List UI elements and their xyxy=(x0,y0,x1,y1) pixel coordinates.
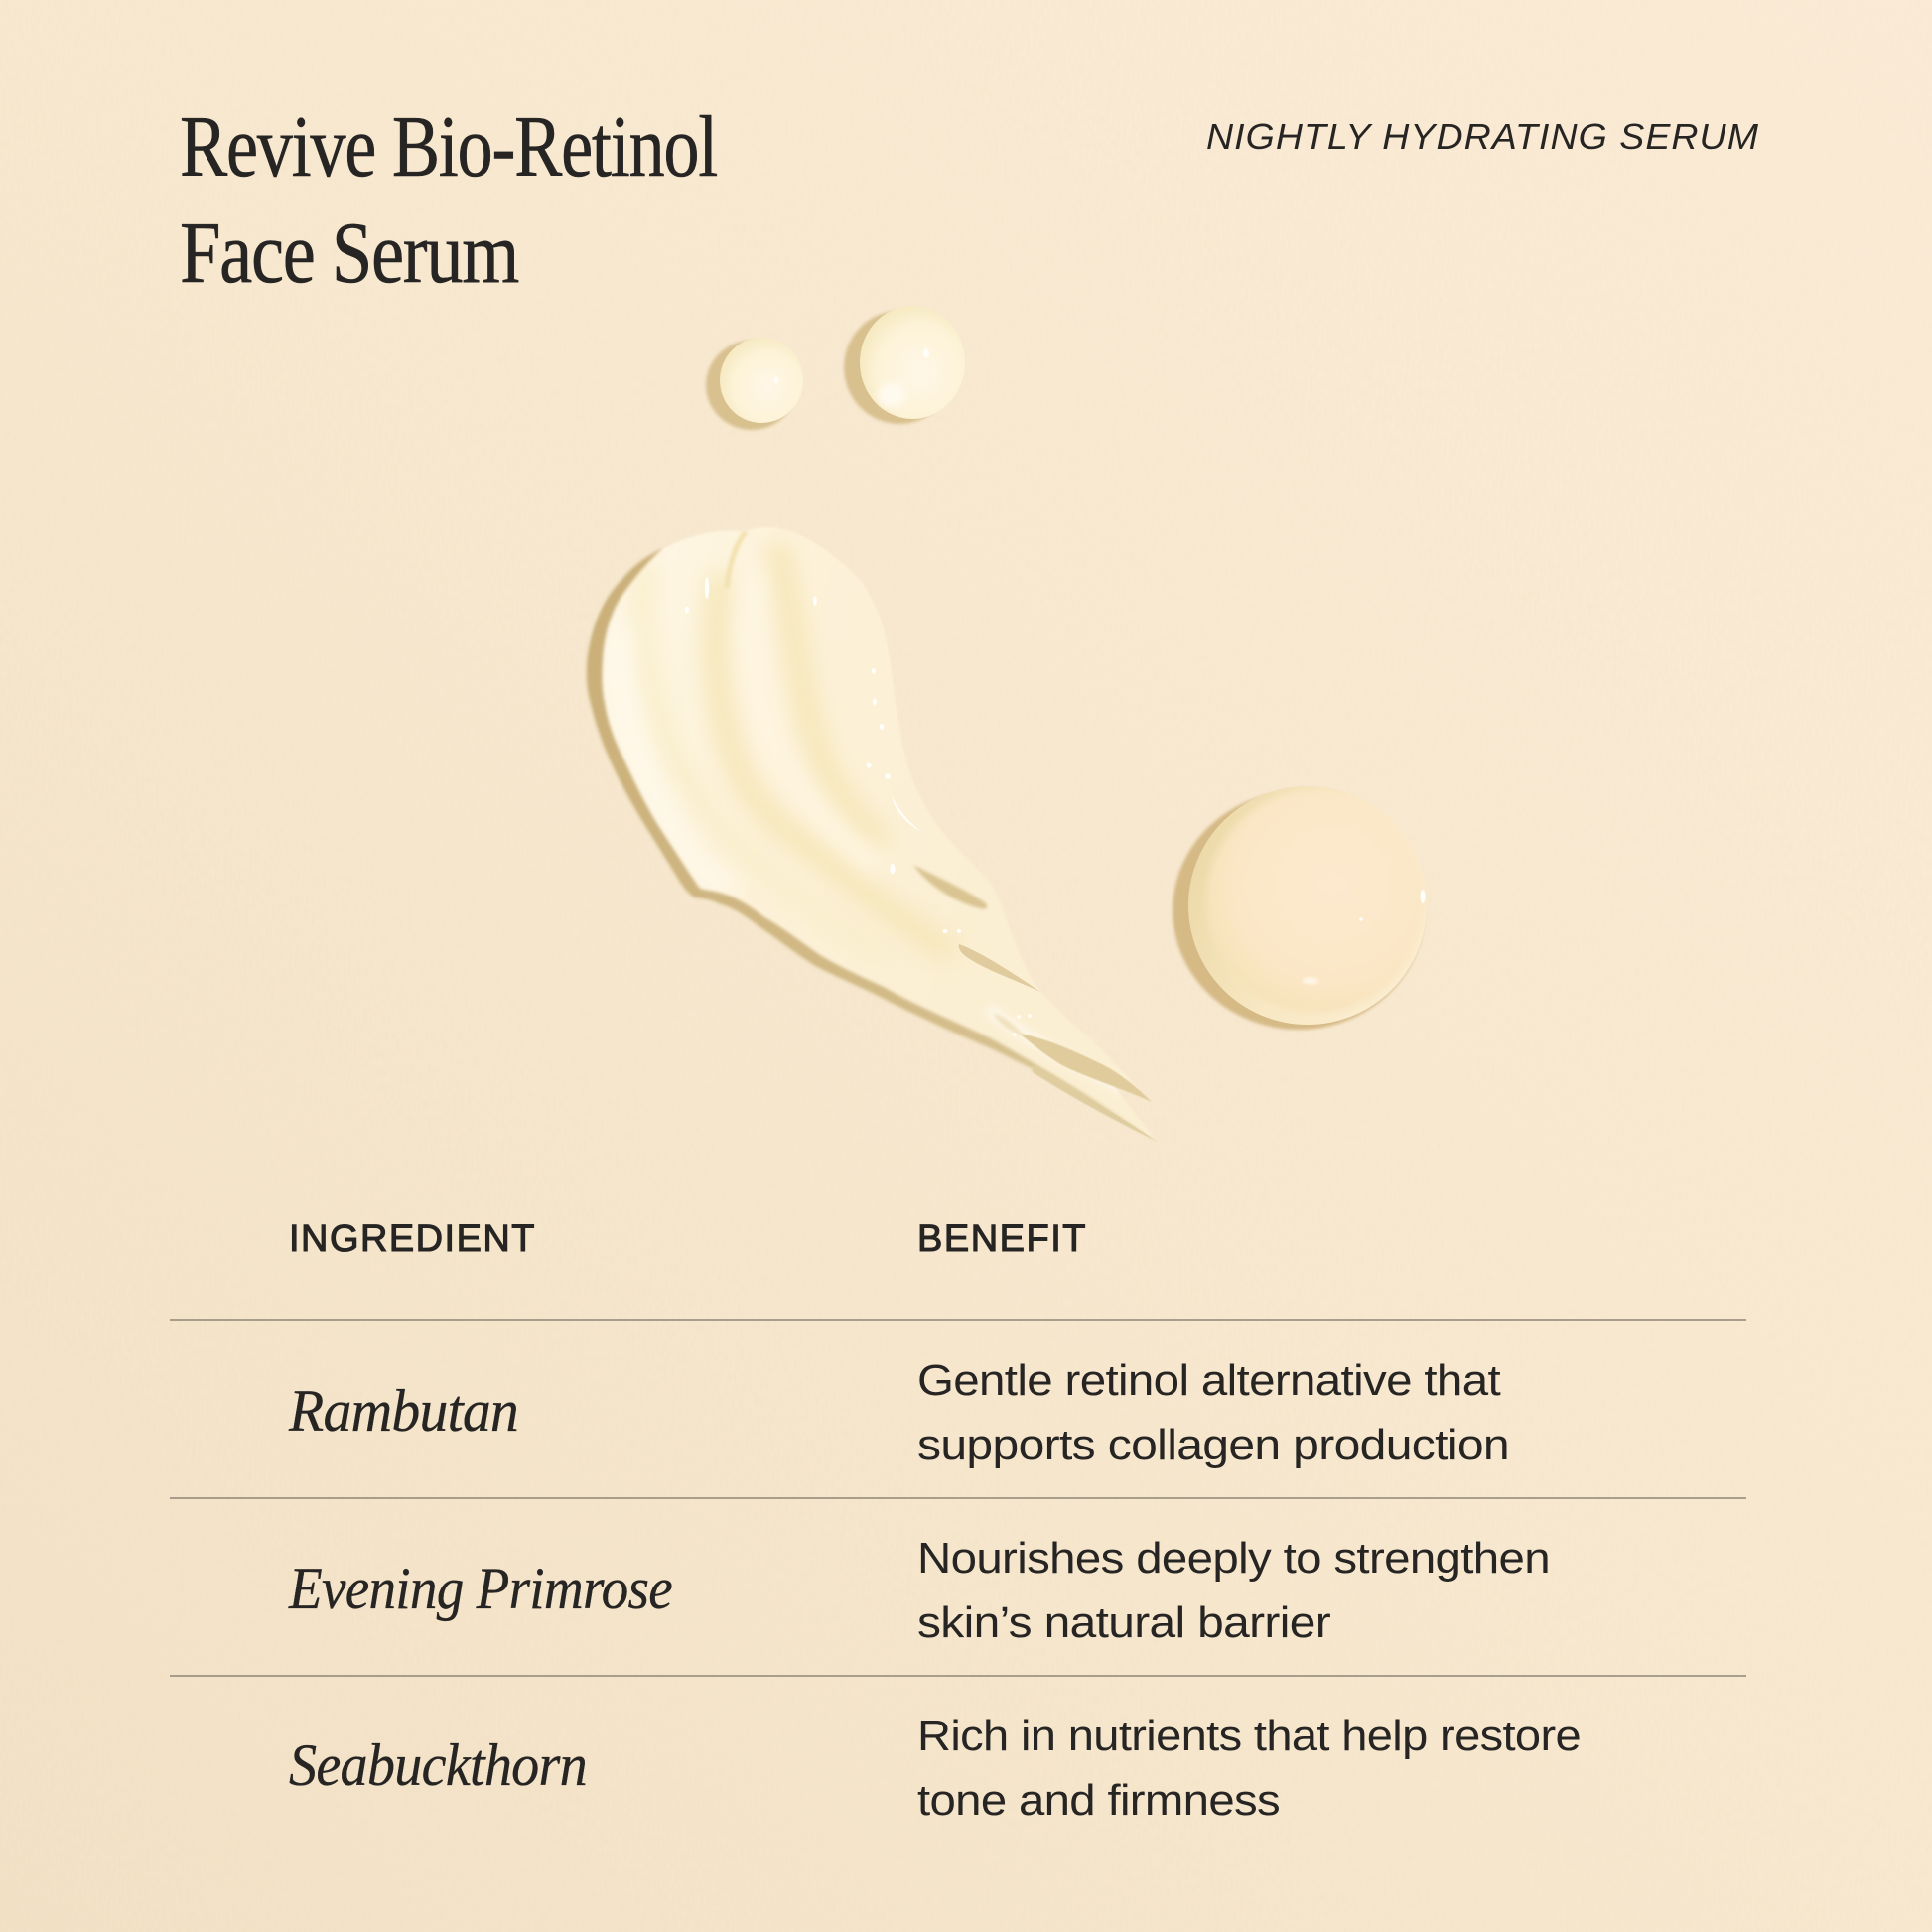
row: Rambutan: Gentle retinol alternative that xyxy=(917,1356,1500,1405)
row: Rambutan: Rambutan xyxy=(288,1378,518,1444)
product texture: medium serum drop xyxy=(844,306,965,424)
row: Rambutan xyxy=(288,1356,1509,1469)
table header: BENEFIT xyxy=(917,1218,1087,1260)
table header xyxy=(289,1218,1087,1260)
row: Seabuckthorn: Rich in nutrients that help restore xyxy=(917,1712,1581,1760)
row: Evening Primrose xyxy=(288,1534,1550,1647)
subtitle: product type: NIGHTLY HYDRATING SERUM xyxy=(1206,116,1759,157)
smear specular highlights xyxy=(685,577,1032,1036)
row: Seabuckthorn: tone and firmness xyxy=(917,1776,1280,1825)
row: Seabuckthorn xyxy=(289,1712,1581,1825)
product texture: small serum drop xyxy=(706,338,803,430)
row: Rambutan: supports collagen production xyxy=(917,1421,1509,1469)
row: Seabuckthorn: Seabuckthorn xyxy=(289,1732,587,1798)
title xyxy=(180,99,717,302)
smear body xyxy=(587,527,1158,1142)
title: Revive Bio-Retinol xyxy=(180,99,717,196)
row: Evening Primrose: Evening Primrose xyxy=(288,1556,672,1621)
row: Evening Primrose: Nourishes deeply to strengthen xyxy=(917,1534,1550,1583)
smear slits at the trailing end xyxy=(913,865,1158,1142)
smear ridges and grooves xyxy=(620,533,1122,1087)
product texture: cream smear xyxy=(587,527,1158,1142)
smear left and lower shadow edge xyxy=(587,548,1158,1142)
product texture: large serum drop xyxy=(1173,786,1427,1030)
table header: INGREDIENT xyxy=(289,1218,536,1260)
title: Face Serum xyxy=(180,206,519,302)
row: Evening Primrose: skin’s natural barrier xyxy=(917,1598,1330,1647)
table: ingredients and benefits xyxy=(170,1218,1746,1825)
